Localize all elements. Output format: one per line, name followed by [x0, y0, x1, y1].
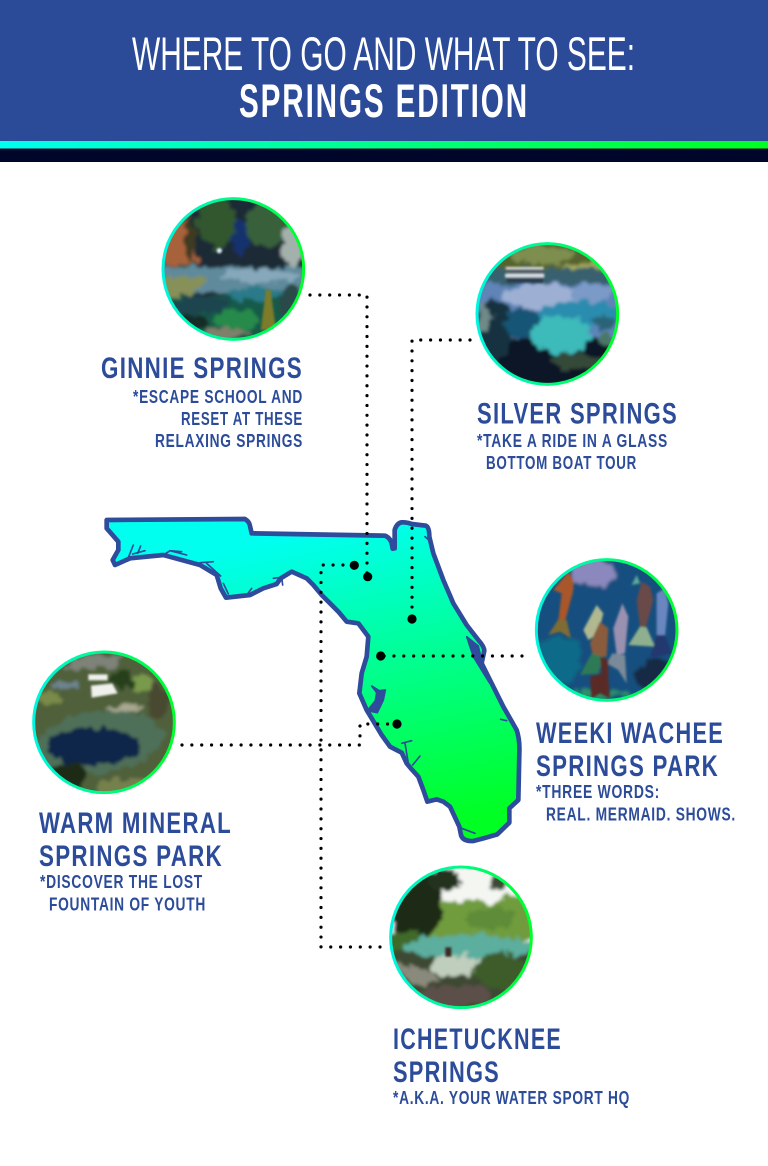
text block: Ginnie Springs: GINNIE SPRINGS — [101, 352, 303, 385]
text block: Ichetucknee Springs: *A.K.A. YOUR WATER SPORT HQ — [393, 1087, 630, 1108]
mermaids — [548, 572, 672, 698]
text block: Ginnie Springs — [101, 352, 303, 451]
cypress stump — [261, 289, 276, 330]
map location dots — [350, 561, 417, 729]
text block: Warm Mineral Springs Park — [39, 807, 232, 914]
text block: Weeki Wachee Springs Park — [536, 717, 736, 824]
dotted connector: Warm Mineral — [182, 724, 397, 745]
text block: Silver Springs: SILVER SPRINGS — [477, 398, 678, 430]
text block: Warm Mineral Springs Park: FOUNTAIN OF YOUTH — [49, 894, 206, 914]
text block: Ginnie Springs: RELAXING SPRINGS — [155, 430, 303, 451]
dotted connector: Weeki Wachee — [381, 654, 522, 658]
text block: Warm Mineral Springs Park: SPRINGS PARK — [39, 840, 223, 873]
photo: Ichetucknee Springs — [389, 866, 533, 1010]
dotted connector: Ichetucknee — [321, 565, 380, 947]
text block: Warm Mineral Springs Park: WARM MINERAL — [39, 807, 232, 840]
photo ring — [163, 199, 304, 339]
photo ring — [391, 867, 531, 1008]
glass bottom boat — [505, 267, 544, 283]
text block: Silver Springs: *TAKE A RIDE IN A GLASS — [477, 430, 668, 451]
photo ring — [536, 560, 677, 700]
map coastal details — [127, 537, 507, 833]
Florida map — [107, 519, 519, 841]
dotted connector: Ginnie Springs — [310, 295, 367, 577]
title line 2: SPRINGS EDITION — [239, 75, 529, 128]
text block: Warm Mineral Springs Park: *DISCOVER THE LOST — [40, 871, 203, 892]
text block: Weeki Wachee Springs Park: *THREE WORDS: — [536, 781, 660, 802]
photo: Warm Mineral Springs — [32, 650, 176, 794]
header banner — [0, 0, 768, 162]
photo ring — [477, 244, 618, 384]
text block: Ginnie Springs: *ESCAPE SCHOOL AND — [133, 386, 303, 407]
text block: Ichetucknee Springs: ICHETUCKNEE — [393, 1023, 562, 1056]
photo ring — [34, 652, 174, 793]
photo: Ginnie Springs — [162, 197, 306, 341]
dotted connector: Silver Springs — [412, 340, 470, 619]
swimmers — [445, 947, 451, 957]
text block: Silver Springs: BOTTOM BOAT TOUR — [486, 452, 637, 473]
text block: Ginnie Springs: RESET AT THESE — [181, 408, 303, 429]
text block: Ichetucknee Springs: SPRINGS — [393, 1056, 500, 1089]
buildings — [88, 674, 118, 698]
photo: Weeki Wachee — [534, 558, 678, 702]
photo: Silver Springs — [476, 242, 620, 386]
text block: Silver Springs — [477, 398, 678, 473]
text block: Ichetucknee Springs — [393, 1023, 630, 1108]
